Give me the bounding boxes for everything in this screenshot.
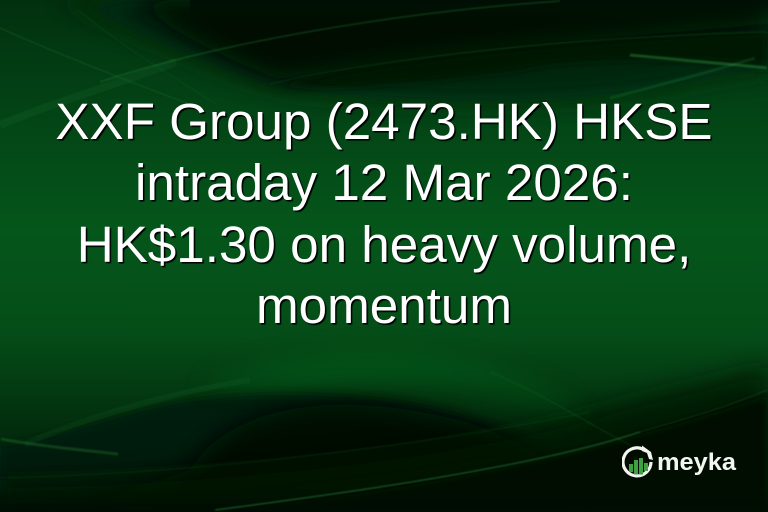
title: momentum [256, 277, 512, 334]
top dark sweep [60, 0, 768, 102]
title [55, 93, 713, 478]
icon: ring with bars [623, 446, 653, 476]
bottom dark hump [0, 393, 630, 512]
title: XXF Group (2473.HK) HKSE [55, 93, 713, 150]
title: intraday 12 Mar 2026: [135, 154, 633, 211]
soft green glow [200, 353, 590, 420]
wordmark: meyka [657, 449, 737, 476]
title: HK$1.30 on heavy volume, [77, 216, 691, 273]
logo: meyka [622, 446, 737, 478]
